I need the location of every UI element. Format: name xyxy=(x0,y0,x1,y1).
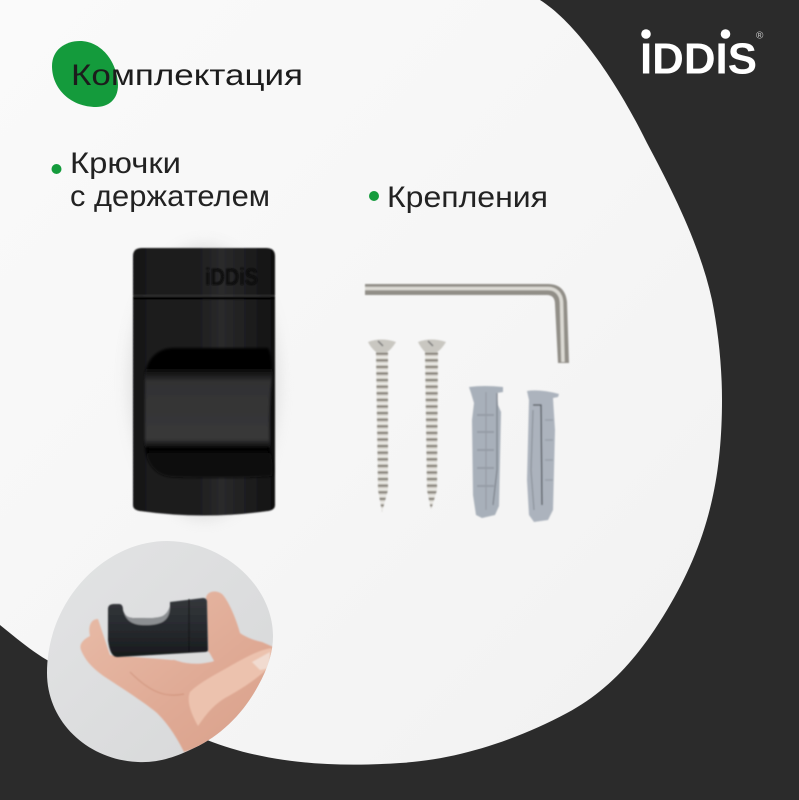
fingernail xyxy=(252,652,270,670)
hook recess xyxy=(145,348,273,478)
label: hooks with holder: с держателем xyxy=(70,180,270,213)
logo: iddis: ® xyxy=(756,30,764,42)
engraved logo: iDDiS xyxy=(205,264,258,291)
hand xyxy=(80,592,280,752)
screw 2 xyxy=(418,340,446,510)
hex key xyxy=(365,284,569,363)
wall plug 2 xyxy=(527,390,559,522)
heading: Комплектация: Комплектация xyxy=(71,59,303,92)
hook notch xyxy=(123,606,170,625)
wall plug 1 xyxy=(469,386,503,518)
logo: iddis: IDDIS xyxy=(640,34,757,84)
gap under hook xyxy=(165,652,214,664)
product: black hook xyxy=(128,244,280,520)
screw 1 xyxy=(368,340,396,512)
small black hook xyxy=(108,598,208,657)
heading: Комплектация xyxy=(52,41,303,107)
label: hooks with holder xyxy=(52,147,270,213)
photo: hook held in hand xyxy=(47,541,273,762)
palm crease xyxy=(130,672,184,695)
green blob accent xyxy=(52,41,118,107)
label: fasteners: Крепления xyxy=(387,181,548,214)
label: hooks with holder: Крючки xyxy=(70,147,181,180)
lit index finger xyxy=(189,648,272,726)
